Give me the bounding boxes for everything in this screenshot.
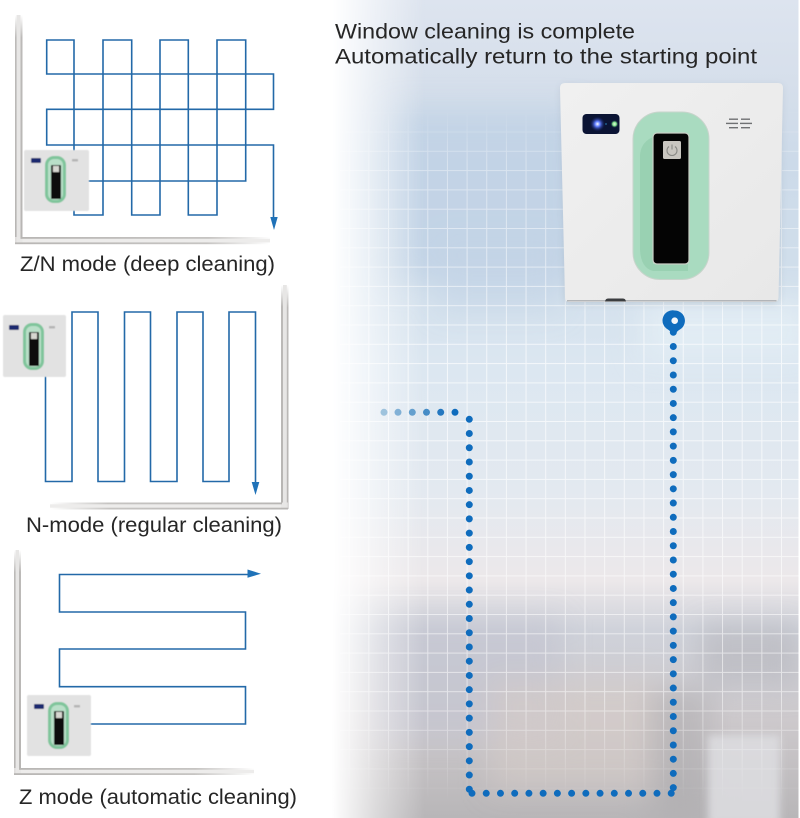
cleaning path	[47, 40, 274, 219]
dotted return route	[380, 332, 673, 793]
window background with grid	[300, 0, 800, 818]
cleaning path	[46, 312, 256, 484]
label: Z/N mode (deep cleaning)	[20, 252, 275, 276]
window frame corner	[15, 15, 270, 244]
heading text	[335, 20, 757, 68]
robot small	[3, 315, 66, 377]
label: Z mode (automatic cleaning)	[19, 785, 297, 809]
panel: Z mode	[14, 550, 297, 809]
charging notch	[605, 298, 626, 302]
heading text: Window cleaning is complete	[335, 20, 635, 44]
window frame corner	[14, 550, 254, 775]
arrow head	[252, 482, 259, 495]
arrow head	[270, 217, 278, 230]
heading text: Automatically return to the starting point	[335, 44, 757, 68]
status LEDs	[582, 114, 620, 134]
robot small	[27, 695, 91, 756]
window frame corner	[50, 285, 288, 510]
robot large	[560, 83, 783, 303]
label: N-mode (regular cleaning)	[26, 513, 282, 537]
cleaning path	[60, 574, 250, 724]
speaker grille	[726, 118, 752, 128]
panel: Z/N mode	[15, 15, 278, 276]
panel: N-mode	[3, 285, 288, 537]
body shadow	[562, 86, 781, 303]
arrow head	[248, 570, 261, 578]
body	[560, 83, 783, 302]
black handle	[653, 133, 689, 264]
robot small	[24, 150, 89, 211]
icon: location pin	[663, 310, 685, 334]
power button	[663, 141, 681, 159]
green handle recess	[633, 112, 709, 280]
